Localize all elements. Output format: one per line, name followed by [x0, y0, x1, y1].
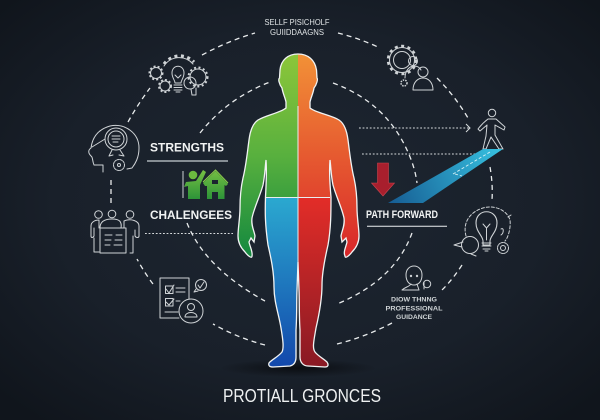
icon: light bulb with gear and speech bubble	[454, 207, 511, 256]
body quadrant: red leg	[298, 197, 330, 366]
professional guidance label: DIOW THNNG	[391, 296, 437, 304]
professional guidance label: PROFESSIONAL	[386, 306, 443, 312]
bottom title: PROTIALL GRONCES	[223, 386, 381, 406]
body outline	[238, 54, 359, 367]
strengths underline	[147, 160, 228, 162]
icon: gear with people	[388, 46, 433, 90]
body divider lines	[266, 106, 330, 262]
icon: gears and light bulbs	[150, 56, 208, 95]
path forward label: PATH FORWARD	[366, 209, 438, 221]
icon: walking person	[478, 109, 505, 149]
icon: head with magnifier and gear	[89, 125, 139, 172]
dotted connector lines	[145, 124, 476, 234]
infographic canvas	[88, 19, 512, 402]
body quadrant: strengths green	[238, 54, 298, 257]
icon: green person and house	[182, 170, 228, 199]
professional guidance label: GUIDANCE	[396, 314, 433, 321]
top subheading: GUIIDDAAGNS	[270, 28, 324, 37]
path forward ramp	[388, 149, 503, 203]
body quadrant: challenges blue leg	[266, 198, 298, 366]
top heading: SELLF PISICHOLF	[264, 18, 330, 27]
floor shadow	[220, 359, 376, 377]
icon: red down arrow	[372, 163, 394, 196]
icon: checklist with user	[160, 278, 206, 323]
icon: team around board	[91, 210, 139, 253]
body quadrant: orange-red torso	[298, 54, 358, 257]
path forward underline	[367, 226, 447, 227]
professional guidance label	[386, 296, 443, 321]
strengths label: STRENGTHS	[150, 140, 224, 154]
challenges label: CHALENGEES	[150, 208, 232, 222]
human body figure	[238, 54, 359, 367]
dashed orbit rings	[111, 33, 492, 345]
icon: professional doctor	[402, 266, 431, 290]
